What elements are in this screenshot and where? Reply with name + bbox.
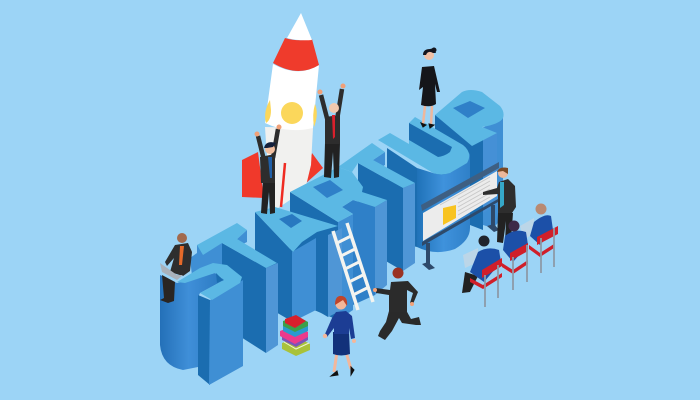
- letter R: [290, 167, 387, 320]
- letter P: [435, 90, 504, 230]
- man with laptop on S: [160, 233, 192, 303]
- businesswoman standing on U: [419, 48, 440, 128]
- audience member middle row with chair: [502, 220, 528, 290]
- books: [280, 315, 310, 356]
- woman in blue walking: [323, 296, 356, 376]
- letter A: [255, 207, 342, 322]
- presentation board: [421, 162, 499, 270]
- letter T first: [197, 223, 278, 353]
- businessman with raised arms right: [318, 84, 346, 178]
- letter S: [160, 253, 243, 385]
- audience member front row with laptop and chair: [462, 236, 502, 307]
- presenter: [483, 168, 516, 243]
- letter T second: [338, 143, 415, 271]
- ladder: [333, 223, 373, 310]
- audience member back row with chair: [520, 204, 558, 273]
- running man: [373, 268, 421, 340]
- letter U: [378, 117, 470, 252]
- rocket: [242, 13, 323, 210]
- slide text lines: [440, 177, 490, 215]
- businessman with raised arms left: [254, 124, 282, 214]
